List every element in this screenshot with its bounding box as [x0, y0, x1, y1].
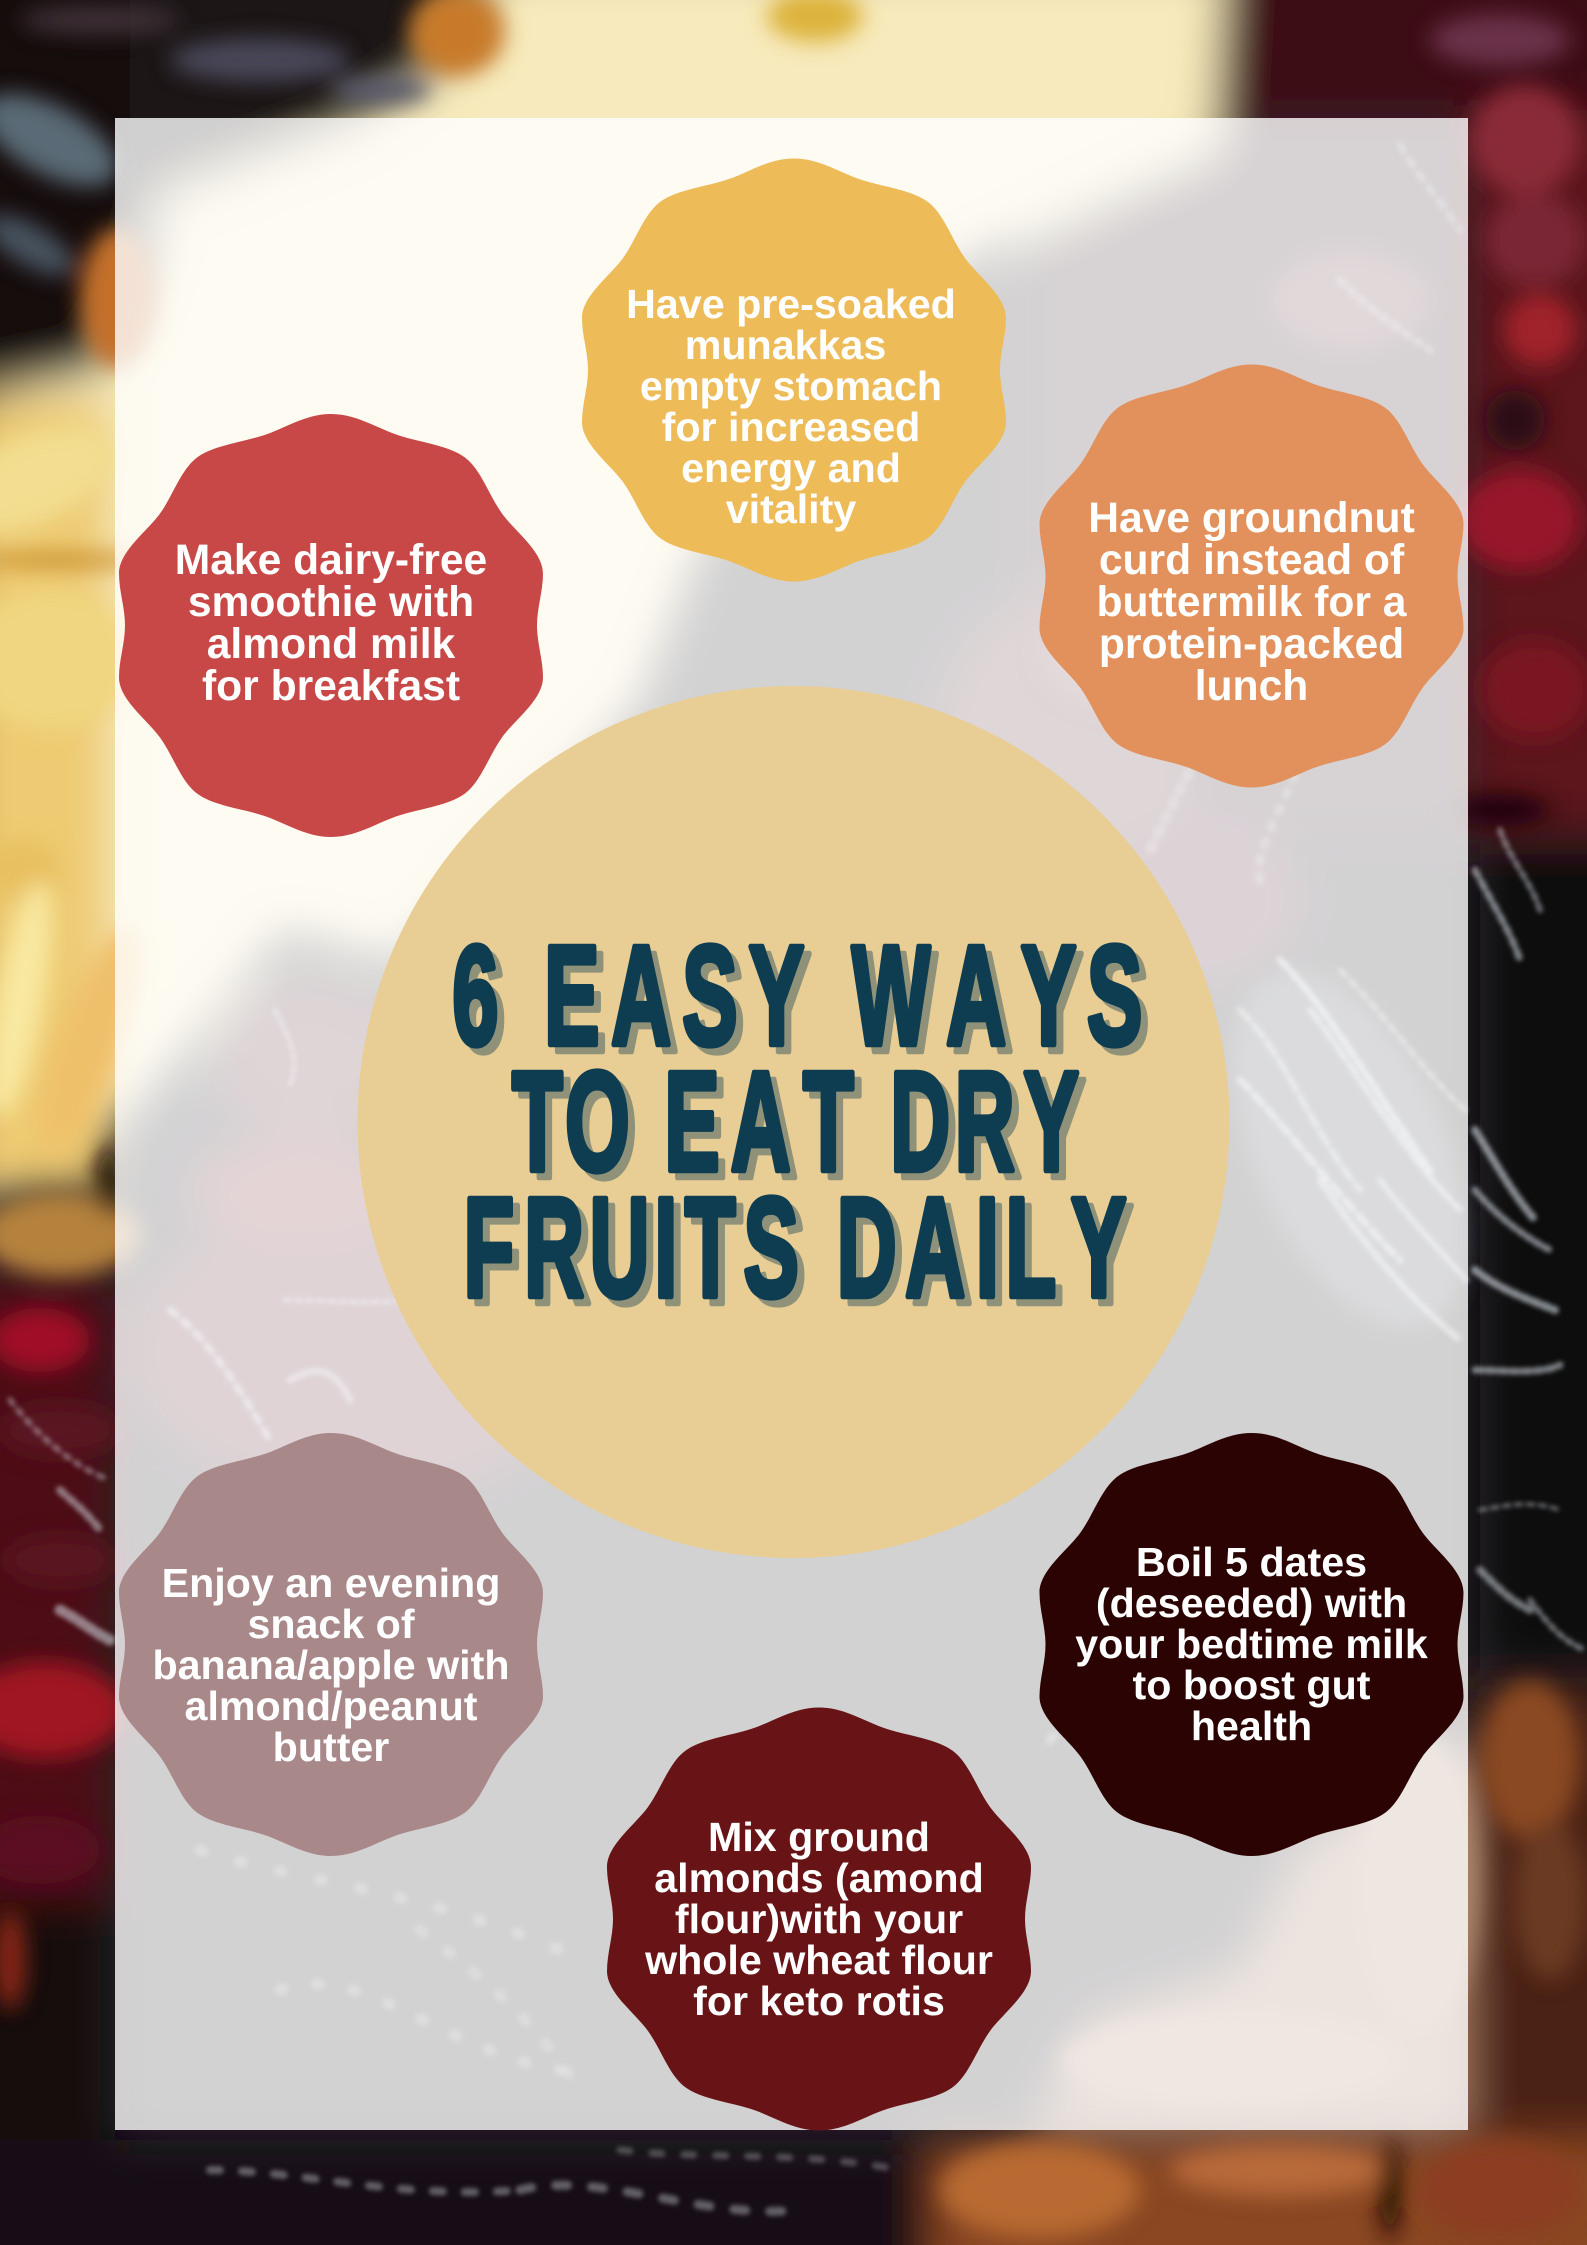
badge: smoothie breakfast: smoothie with — [188, 578, 474, 626]
title — [452, 916, 1142, 1327]
badge: smoothie breakfast: Make dairy-free — [175, 536, 487, 584]
badge: groundnut curd — [1040, 364, 1464, 788]
badge: dates with milk: your bedtime milk — [1075, 1621, 1428, 1667]
badge: smoothie breakfast: for breakfast — [202, 662, 460, 710]
badge: groundnut curd: lunch — [1195, 662, 1308, 710]
badge: evening snack: Enjoy an evening — [162, 1560, 500, 1606]
panel: translucent white overlay — [115, 118, 1468, 2130]
badge: evening snack: banana/apple with — [152, 1642, 510, 1688]
title: TO EAT DRY — [512, 1042, 1079, 1201]
badge: munakkas — [582, 158, 1006, 582]
badge: evening snack — [119, 1433, 543, 1856]
title: FRUITS DAILY — [464, 1168, 1126, 1327]
badge: smoothie breakfast: almond milk — [207, 620, 456, 668]
badge: munakkas: vitality — [726, 486, 856, 532]
badge: almond flour rotis: flour)with your — [675, 1896, 963, 1942]
badge: groundnut curd: protein-packed — [1099, 620, 1404, 668]
badge: munakkas: munakkas — [685, 322, 886, 368]
badge: evening snack: snack of — [247, 1601, 415, 1647]
badge: dates with milk: Boil 5 dates — [1136, 1539, 1367, 1585]
badge: groundnut curd: Have groundnut — [1088, 494, 1415, 542]
badge: smoothie breakfast — [119, 414, 543, 837]
badge: dates with milk: health — [1191, 1703, 1312, 1749]
badge: dates with milk: (deseeded) with — [1096, 1580, 1407, 1626]
badge: munakkas: energy and — [681, 445, 901, 491]
badge: almond flour rotis: almonds (amond — [654, 1855, 984, 1901]
badge: dates with milk — [1040, 1433, 1464, 1856]
badge: munakkas: Have pre-soaked — [626, 281, 956, 327]
badge: almond flour rotis: for keto rotis — [693, 1978, 945, 2024]
badge: almond flour rotis: Mix ground — [708, 1814, 930, 1860]
badge: munakkas: empty stomach — [640, 363, 942, 409]
badge: groundnut curd: buttermilk for a — [1096, 578, 1407, 626]
badge: groundnut curd: curd instead of — [1099, 536, 1405, 584]
title: 6 EASY WAYS — [452, 916, 1142, 1075]
badge: munakkas: for increased — [662, 404, 920, 450]
central circle — [358, 686, 1230, 1558]
badge: dates with milk: to boost gut — [1133, 1662, 1371, 1708]
badge: evening snack: butter — [273, 1724, 389, 1770]
badge: almond flour rotis: whole wheat flour — [644, 1937, 993, 1983]
badge: evening snack: almond/peanut — [185, 1683, 478, 1729]
badge: almond flour rotis — [607, 1708, 1031, 2130]
